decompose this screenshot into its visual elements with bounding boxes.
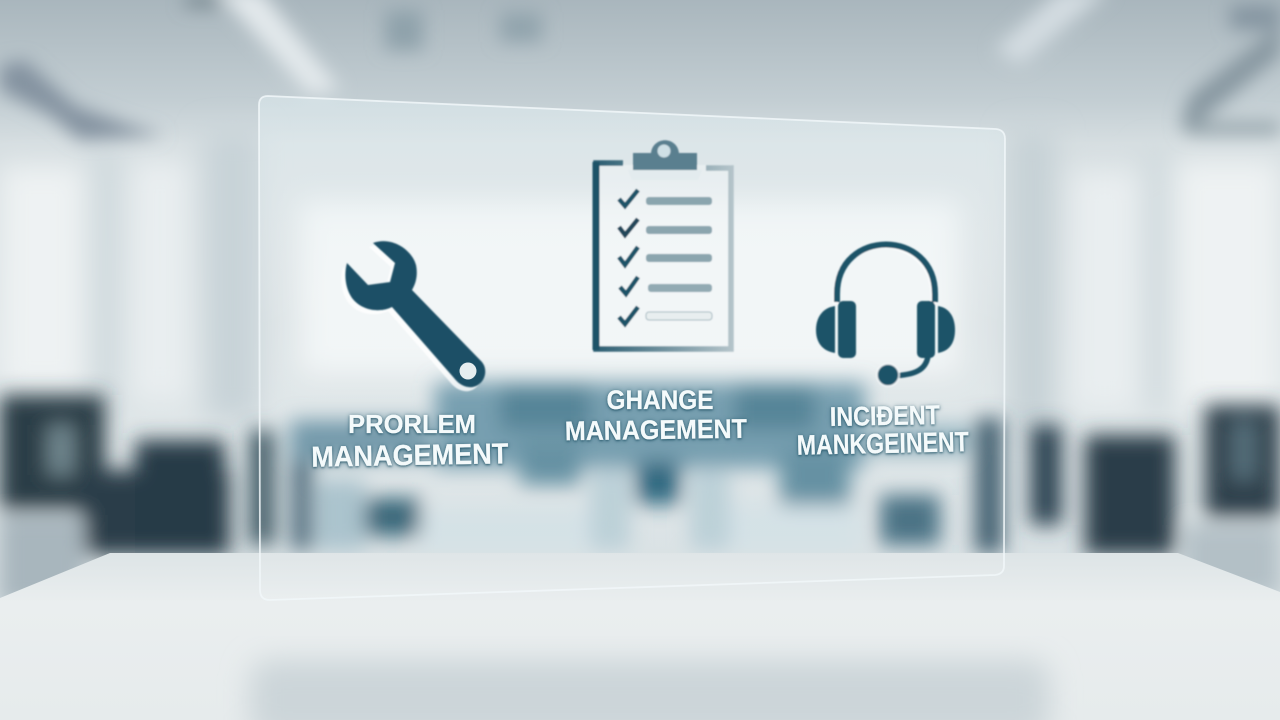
label: Change Management xyxy=(565,385,748,446)
table surface xyxy=(0,553,1280,720)
label: Incident Management: MANKGEINENT xyxy=(796,426,969,461)
label: Change Management: MANAGEMENT xyxy=(565,414,748,446)
icon: wrench xyxy=(341,241,485,391)
checklist rows xyxy=(619,190,712,324)
icon: headset xyxy=(816,244,955,386)
label: Change Management: GHANGE xyxy=(606,385,714,415)
label: Problem Management: MANAGEMENT xyxy=(311,438,509,474)
panel: glass sheet xyxy=(259,96,1005,600)
icon: clipboard checklist xyxy=(595,140,731,350)
label: Problem Management xyxy=(311,409,509,474)
label: Incident Management xyxy=(796,400,969,461)
label: Incident Management: INCIĐENT xyxy=(830,400,941,432)
label: Problem Management: PRORLEM xyxy=(348,409,476,439)
